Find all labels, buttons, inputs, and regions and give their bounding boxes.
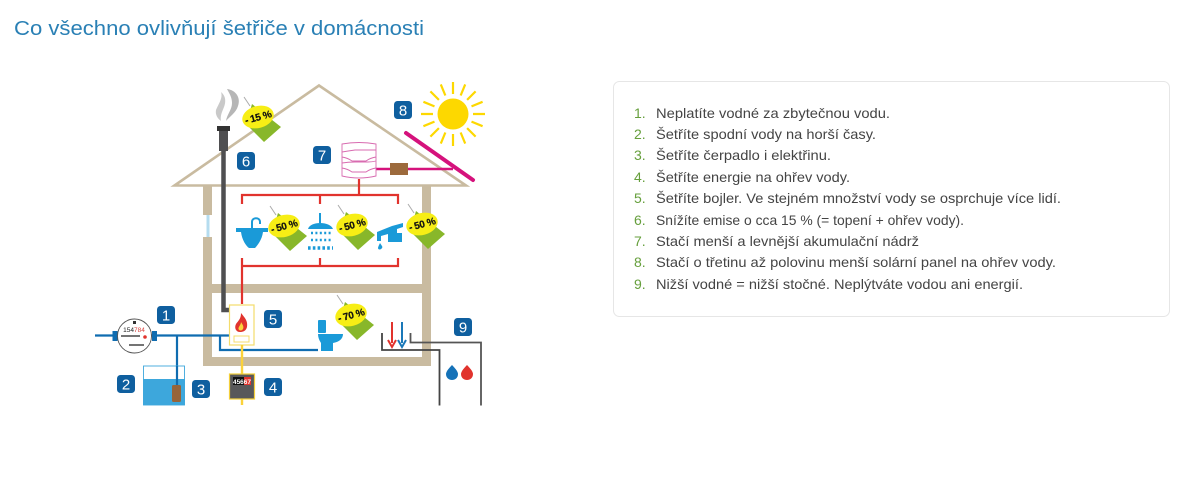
savings tag: -50 % sink: - 50 % xyxy=(270,218,299,236)
badge 3 xyxy=(192,380,210,398)
list item 5: 5. xyxy=(634,190,646,206)
savings tag: -50 % sink xyxy=(266,206,307,251)
badge 4 xyxy=(264,378,282,396)
hot water pipes xyxy=(242,179,398,304)
panel: list of benefits xyxy=(614,82,1170,316)
badge 9: 9 xyxy=(459,320,467,336)
badge 2 xyxy=(117,375,135,394)
badge 7 xyxy=(313,146,331,164)
list item 2: Šetříte spodní vody na horší časy. xyxy=(656,126,876,142)
title: Co všechno ovlivňují šetřiče v domácnosti xyxy=(14,18,424,40)
savings tag: -50 % shower xyxy=(334,205,375,250)
sun xyxy=(421,82,485,146)
badge 1 xyxy=(157,306,175,324)
solar panel and accumulation tank xyxy=(342,133,473,180)
badge 8 xyxy=(394,101,412,120)
house structure xyxy=(174,86,466,366)
list item 8: Stačí o třetinu až polovinu menší solární panel na ohřev vody. xyxy=(656,254,1056,270)
list item 8: 8. xyxy=(634,254,646,270)
boiler with flame xyxy=(230,305,254,345)
list item 1: 1. xyxy=(634,105,646,121)
list item 6: 6. xyxy=(634,212,646,228)
badge 5: 5 xyxy=(269,312,277,328)
list item 1: Neplatíte vodné za zbytečnou vodu. xyxy=(656,105,890,121)
list item 5: Šetříte bojler. Ve stejném množství vody se osprchuje více lidí. xyxy=(656,190,1061,206)
rain water tank xyxy=(143,366,185,405)
badge 1: 1 xyxy=(162,308,170,324)
badge 8: 8 xyxy=(399,102,407,120)
gas line and gas meter xyxy=(230,345,254,405)
badge 4: 4 xyxy=(269,380,277,396)
list item 2: 2. xyxy=(634,126,646,142)
water meter: 154784 xyxy=(123,327,145,334)
badge 7: 7 xyxy=(318,148,326,164)
savings tag: -50 % faucet: - 50 % xyxy=(408,216,437,234)
icon: sink xyxy=(236,218,268,248)
icon: faucet xyxy=(377,223,403,250)
list item 6: Snížíte emise o cca 15 % (= topení + ohřev vody). xyxy=(656,212,964,228)
badge 6: 6 xyxy=(242,154,250,170)
badge 5 xyxy=(264,310,282,328)
badge 6 xyxy=(237,152,255,170)
badge 9 xyxy=(454,318,472,336)
savings tag: -70 % toilet xyxy=(333,295,374,340)
water meter xyxy=(112,319,157,353)
list item 3: 3. xyxy=(634,147,646,163)
savings tag: -70 % toilet: - 70 % xyxy=(337,307,366,325)
savings tag: -50 % faucet xyxy=(404,204,445,249)
gas line and gas meter: 45667 xyxy=(233,379,251,386)
chimney with smoke xyxy=(216,89,239,310)
savings tag: -50 % shower: - 50 % xyxy=(338,217,367,235)
badge 2: 2 xyxy=(122,376,130,394)
list item 7: Stačí menší a levnější akumulační nádrž xyxy=(656,233,919,249)
icon: cold and hot water drops xyxy=(446,365,473,380)
savings tag: -15 % xyxy=(240,97,281,142)
badge 3: 3 xyxy=(197,382,205,398)
icon: shower xyxy=(308,213,333,248)
cold water pipes xyxy=(95,335,318,385)
waste water arrows and drains xyxy=(382,322,481,406)
list item 9: Nižší vodné = nižší stočné. Neplýtváte vodou ani energií. xyxy=(656,276,1023,292)
list item 7: 7. xyxy=(634,233,646,249)
list item 4: Šetříte energie na ohřev vody. xyxy=(656,169,850,185)
savings tag: -15 %: - 15 % xyxy=(244,109,273,127)
list item 4: 4. xyxy=(634,169,646,185)
list item 3: Šetříte čerpadlo i elektřinu. xyxy=(656,147,831,163)
house diagram xyxy=(95,82,485,406)
icon: toilet xyxy=(318,320,343,351)
list item 9: 9. xyxy=(634,276,646,292)
